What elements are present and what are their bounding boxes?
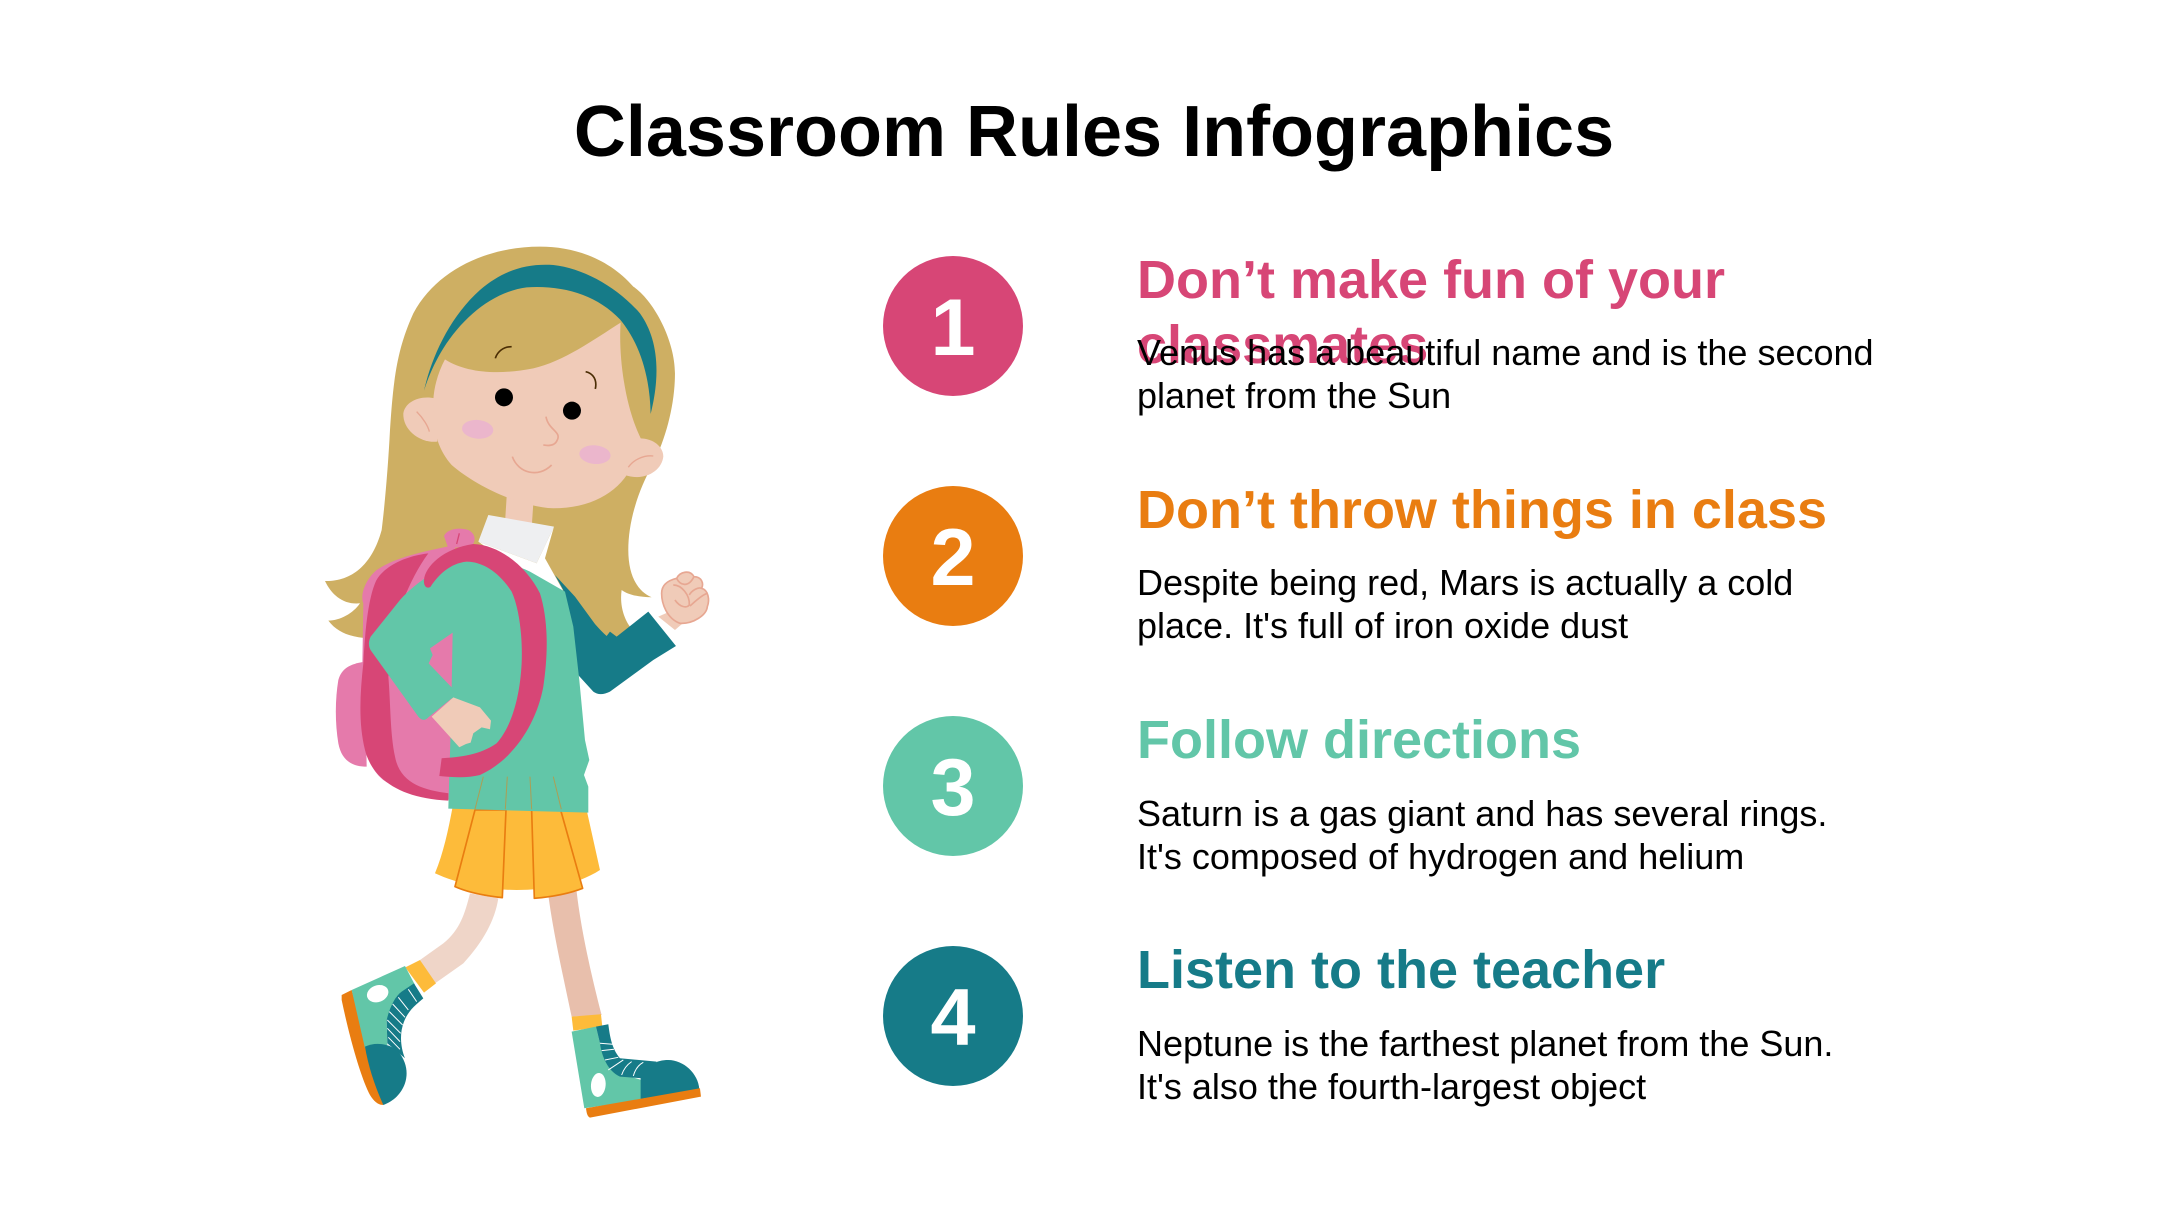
number circle 2 [883, 486, 1023, 626]
face [433, 323, 643, 508]
ear details [417, 412, 653, 467]
right ear [625, 438, 663, 477]
rule 3 description [1137, 793, 1827, 877]
back shoe [342, 966, 423, 1105]
rule 2 description: place. It's full of iron oxide dust [1137, 605, 1628, 646]
number circle 4 [883, 946, 1023, 1086]
back leg [342, 893, 498, 1105]
rule 2 heading: Don’t throw things in class [1137, 480, 1827, 540]
rule 2 description: Despite being red, Mars is actually a cold [1137, 562, 1793, 603]
rule 2 description [1137, 562, 1793, 646]
rule 3 description: It's composed of hydrogen and helium [1137, 836, 1744, 877]
left ear [403, 397, 437, 442]
rule 4 description [1137, 1023, 1833, 1107]
backpack strap [424, 544, 547, 777]
number circle 2: 2 [930, 513, 976, 603]
raised arm and fist [555, 572, 709, 694]
front shoe [572, 1024, 701, 1118]
number circle 3: 3 [930, 743, 976, 833]
cheeks [461, 419, 611, 465]
number circle 1 [883, 256, 1023, 396]
backpack band [360, 553, 448, 801]
eyebrows [495, 347, 596, 389]
skirt [435, 807, 600, 898]
number circle 3 [883, 716, 1023, 856]
number circle 1: 1 [930, 283, 976, 373]
head [403, 265, 663, 508]
collar and neck [478, 497, 565, 594]
rule 4 description: Neptune is the farthest planet from the Sun. [1137, 1023, 1833, 1064]
hair [325, 247, 675, 638]
number circle 4: 4 [930, 973, 976, 1063]
title: Classroom Rules Infographics [574, 92, 1614, 172]
rule 4 heading: Listen to the teacher [1137, 940, 1665, 1000]
rule 1 description [1137, 332, 1874, 416]
tucked hand [432, 697, 491, 747]
hairband [424, 265, 656, 414]
backpack [336, 529, 475, 801]
fist [662, 572, 709, 623]
eyes [495, 388, 581, 420]
nose and mouth [512, 417, 558, 473]
sweater [369, 561, 589, 813]
rule 1 heading: Don’t make fun of your classmates [1137, 250, 1725, 374]
pink gap in arm [429, 633, 453, 687]
rule 3 description: Saturn is a gas giant and has several rings. [1137, 793, 1827, 834]
rule 3 heading: Follow directions [1137, 710, 1581, 770]
front sock [572, 1014, 602, 1031]
rule 1 description: planet from the Sun [1137, 375, 1451, 416]
rule 1 description: Venus has a beautiful name and is the second [1137, 332, 1874, 373]
front leg [548, 892, 701, 1118]
rule 4 description: It's also the fourth-largest object [1137, 1066, 1646, 1107]
back sock [405, 960, 436, 993]
